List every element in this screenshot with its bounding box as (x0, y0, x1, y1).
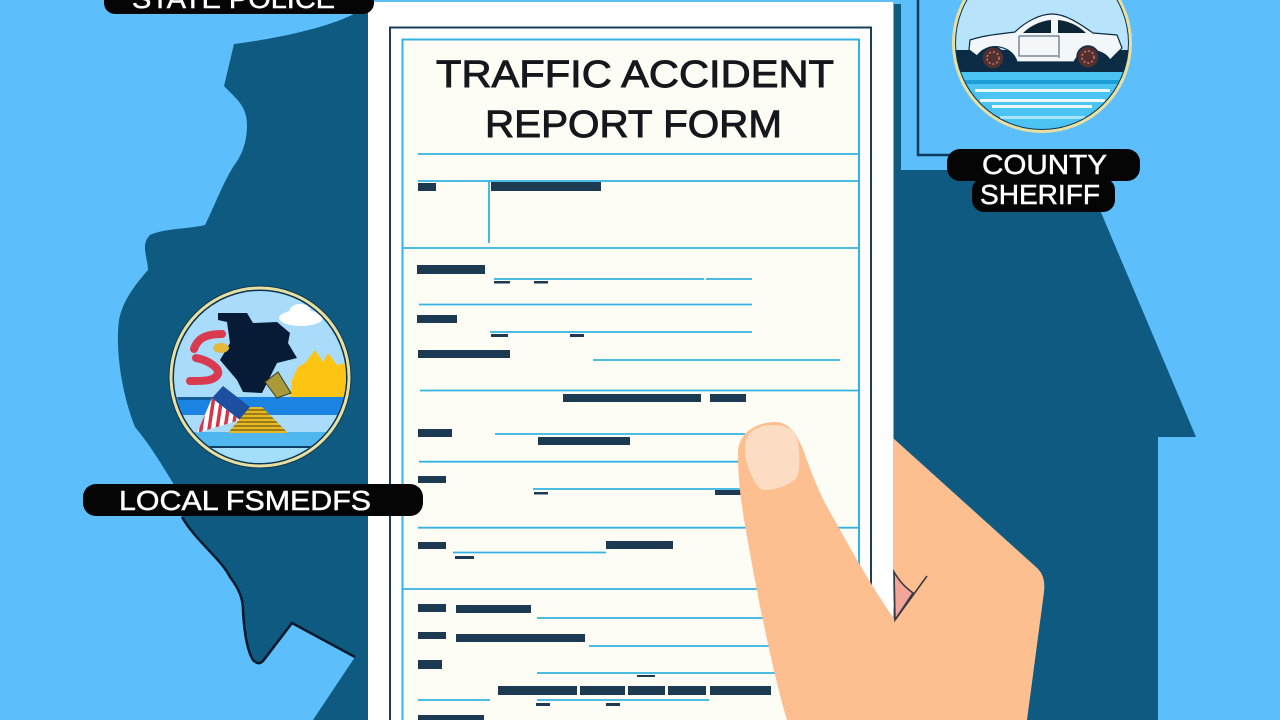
water bands (170, 397, 350, 415)
car door lines (1019, 36, 1059, 58)
label: county sheriff: COUNTY (982, 149, 1107, 180)
sun (290, 350, 346, 397)
form title: REPORT FORM (485, 104, 782, 146)
form inner sheet (402, 39, 859, 720)
form ruled lines (402, 154, 859, 700)
form inner border (402, 40, 859, 720)
gold wheat (228, 407, 288, 433)
connector line to county sheriff (918, 0, 950, 155)
form title (436, 54, 834, 146)
report form paper (368, 2, 894, 720)
label: local: LOCAL FSMEDFS (119, 485, 371, 516)
car wheels (982, 46, 1099, 69)
eagle (218, 313, 297, 393)
flag shield stripes (197, 398, 240, 433)
form redacted text bars (417, 182, 771, 720)
cloud (279, 304, 323, 326)
car body (969, 14, 1122, 62)
map right strip (894, 4, 901, 170)
form title: TRAFFIC ACCIDENT (436, 54, 834, 96)
red ribbons (190, 334, 222, 381)
small tick line (895, 576, 927, 620)
flag shield blue (212, 386, 250, 420)
map coast outline (182, 517, 355, 663)
label: county sheriff (947, 149, 1140, 212)
thumbnail (745, 425, 799, 490)
badge: county car (950, 0, 1135, 134)
gold ornament (213, 343, 229, 353)
car windows (1023, 20, 1086, 33)
form outer border (390, 28, 871, 720)
badge: local seal (169, 286, 351, 468)
label: local (83, 484, 423, 516)
small triangle mark (894, 572, 913, 620)
label: county sheriff: SHERIFF (980, 179, 1100, 210)
hand holding the form (738, 422, 1044, 720)
wheel hubs (987, 51, 1094, 64)
olive shield (265, 372, 291, 398)
